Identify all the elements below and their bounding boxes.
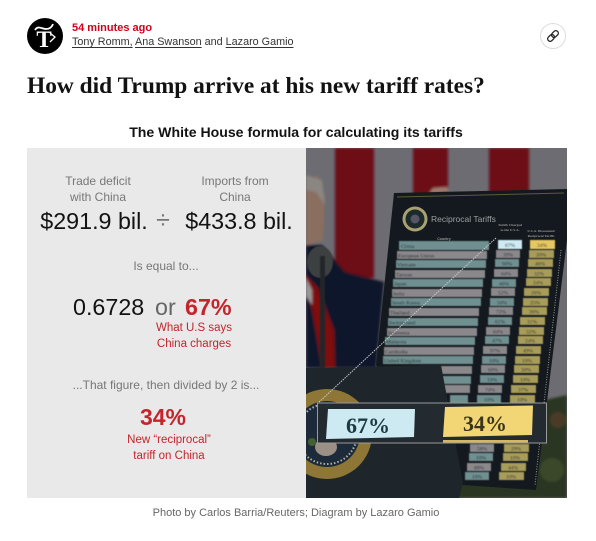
board rows: 10% bbox=[522, 358, 532, 364]
board rows: 36% bbox=[529, 310, 539, 316]
board rows: 39% bbox=[503, 252, 513, 258]
board rows: 10% bbox=[517, 398, 527, 404]
microphone bbox=[307, 246, 333, 368]
note: reciprocal tariff bbox=[127, 434, 211, 462]
photo: president holding tariff board bbox=[306, 148, 567, 498]
board rows: Switzerland bbox=[389, 320, 416, 326]
board rows: 37% bbox=[518, 388, 528, 394]
callout value: 34%: 34% bbox=[463, 411, 507, 436]
board rows: China bbox=[401, 244, 415, 250]
tariff board: Tariffs Charged bbox=[498, 223, 522, 227]
tariff board: to the U.S.A. bbox=[501, 228, 520, 232]
board rows: 10% bbox=[489, 358, 499, 364]
note: what U.S. says: What U.S says bbox=[156, 322, 232, 334]
board rows: 10% bbox=[487, 378, 497, 384]
division sign: ÷ bbox=[156, 206, 170, 234]
value: ratio bbox=[73, 294, 232, 320]
board rows: 26% bbox=[531, 290, 541, 296]
icon: newspaper logo: T bbox=[36, 27, 52, 52]
label: imports bbox=[201, 174, 269, 204]
board rows: 10% bbox=[484, 398, 494, 404]
board rows: 46% bbox=[535, 262, 545, 268]
board rows: 10% bbox=[476, 456, 486, 462]
board rows: 58% bbox=[477, 446, 487, 452]
byline: Tony Romm, Ana Swanson and Lazaro Gamio bbox=[72, 36, 294, 48]
board rows: 44% bbox=[508, 466, 518, 472]
callout value: 34% bbox=[443, 406, 533, 437]
board rows: 24% bbox=[525, 338, 535, 344]
icon: share link button bbox=[540, 23, 566, 49]
note: reciprocal tariff: tariff on China bbox=[133, 450, 205, 462]
tariff board: Country bbox=[437, 237, 451, 241]
board rows: Cambodia bbox=[385, 350, 408, 356]
note: reciprocal tariff: New “reciprocal” bbox=[127, 434, 211, 446]
note: what U.S. says bbox=[156, 322, 232, 350]
label: imports: China bbox=[219, 190, 251, 204]
callout value: 67%: 67% bbox=[346, 413, 390, 438]
label: imports: Imports from bbox=[201, 174, 269, 188]
board rows: 30% bbox=[521, 368, 531, 374]
label: trade deficit bbox=[65, 174, 131, 204]
chart heading: The White House formula for calculating its tariffs bbox=[129, 124, 463, 140]
caption: Photo by Carlos Barria/Reuters; Diagram by Lazaro Gamio bbox=[153, 507, 439, 519]
tariff board: Reciprocal Tariffs bbox=[528, 234, 555, 238]
board rows: 32% bbox=[526, 330, 536, 336]
board rows: 67% bbox=[505, 243, 515, 249]
panel: formula: 67% bbox=[185, 294, 232, 320]
board rows: 49% bbox=[523, 348, 533, 354]
board rows: 90% bbox=[502, 262, 512, 268]
board rows: 24% bbox=[533, 280, 543, 286]
board rows: 10% bbox=[506, 474, 516, 480]
board rows: 60% bbox=[488, 368, 498, 374]
board rows: 10% bbox=[472, 474, 482, 480]
board rows: India bbox=[393, 292, 405, 298]
board rows: 52% bbox=[498, 290, 508, 296]
board rows: Taiwan bbox=[396, 272, 412, 278]
panel: formula bbox=[27, 148, 306, 498]
label: trade deficit: Trade deficit bbox=[65, 174, 131, 188]
podium seal bbox=[282, 389, 372, 479]
board rows: Thailand bbox=[390, 310, 410, 316]
board rows: South Korea bbox=[392, 300, 420, 306]
board rows: 97% bbox=[490, 348, 500, 354]
board rows: 25% bbox=[530, 300, 540, 306]
board seal bbox=[402, 206, 428, 232]
icon: newspaper logo bbox=[27, 18, 63, 54]
board rows: Japan bbox=[394, 282, 407, 288]
board rows: 10% bbox=[510, 456, 520, 462]
board rows: 72% bbox=[496, 310, 506, 316]
board rows: 61% bbox=[495, 320, 505, 326]
panel: formula: or bbox=[155, 294, 176, 320]
tariff board bbox=[376, 189, 567, 490]
callout value: 67% bbox=[326, 409, 415, 439]
board rows: European Union bbox=[398, 254, 434, 260]
board rows: 10% bbox=[520, 378, 530, 384]
label: trade deficit: with China bbox=[70, 190, 126, 204]
board rows: 34% bbox=[537, 243, 547, 249]
note: what U.S. says: China charges bbox=[157, 338, 231, 350]
board rows: 46% bbox=[499, 282, 509, 288]
tariff board: U.S.A. Discounted bbox=[527, 229, 555, 233]
text: is equal to: Is equal to... bbox=[133, 259, 199, 273]
board rows: United Kingdom bbox=[384, 358, 422, 364]
board rows: 74% bbox=[485, 388, 495, 394]
text: divided by two: ...That figure, then divided by 2 is... bbox=[73, 378, 259, 392]
zoom callout bbox=[318, 238, 546, 443]
board rows: 64% bbox=[493, 330, 503, 336]
board title: Reciprocal Tariffs bbox=[431, 214, 496, 224]
value: ratio: 0.6728 bbox=[73, 294, 144, 320]
board rows: 88% bbox=[474, 466, 484, 472]
board rows bbox=[383, 240, 555, 480]
board rows: 50% bbox=[497, 300, 507, 306]
board rows: Indonesia bbox=[388, 330, 410, 336]
board rows: Vietnam bbox=[397, 262, 416, 268]
value: reciprocal tariff: 34% bbox=[140, 404, 186, 430]
podium bbox=[282, 365, 463, 498]
board rows: 20% bbox=[536, 252, 546, 258]
value: imports: $433.8 bil. bbox=[185, 208, 293, 234]
board rows: 47% bbox=[492, 338, 502, 344]
board rows: 31% bbox=[527, 320, 537, 326]
value: trade deficit: $291.9 bil. bbox=[40, 208, 148, 234]
title: How did Trump arrive at his new tariff rates? bbox=[27, 73, 485, 99]
board rows: 29% bbox=[511, 446, 521, 452]
board rows: 64% bbox=[501, 272, 511, 278]
timestamp: 54 minutes ago bbox=[72, 22, 152, 34]
board rows: 32% bbox=[534, 272, 544, 278]
board rows: Malaysia bbox=[386, 340, 407, 346]
